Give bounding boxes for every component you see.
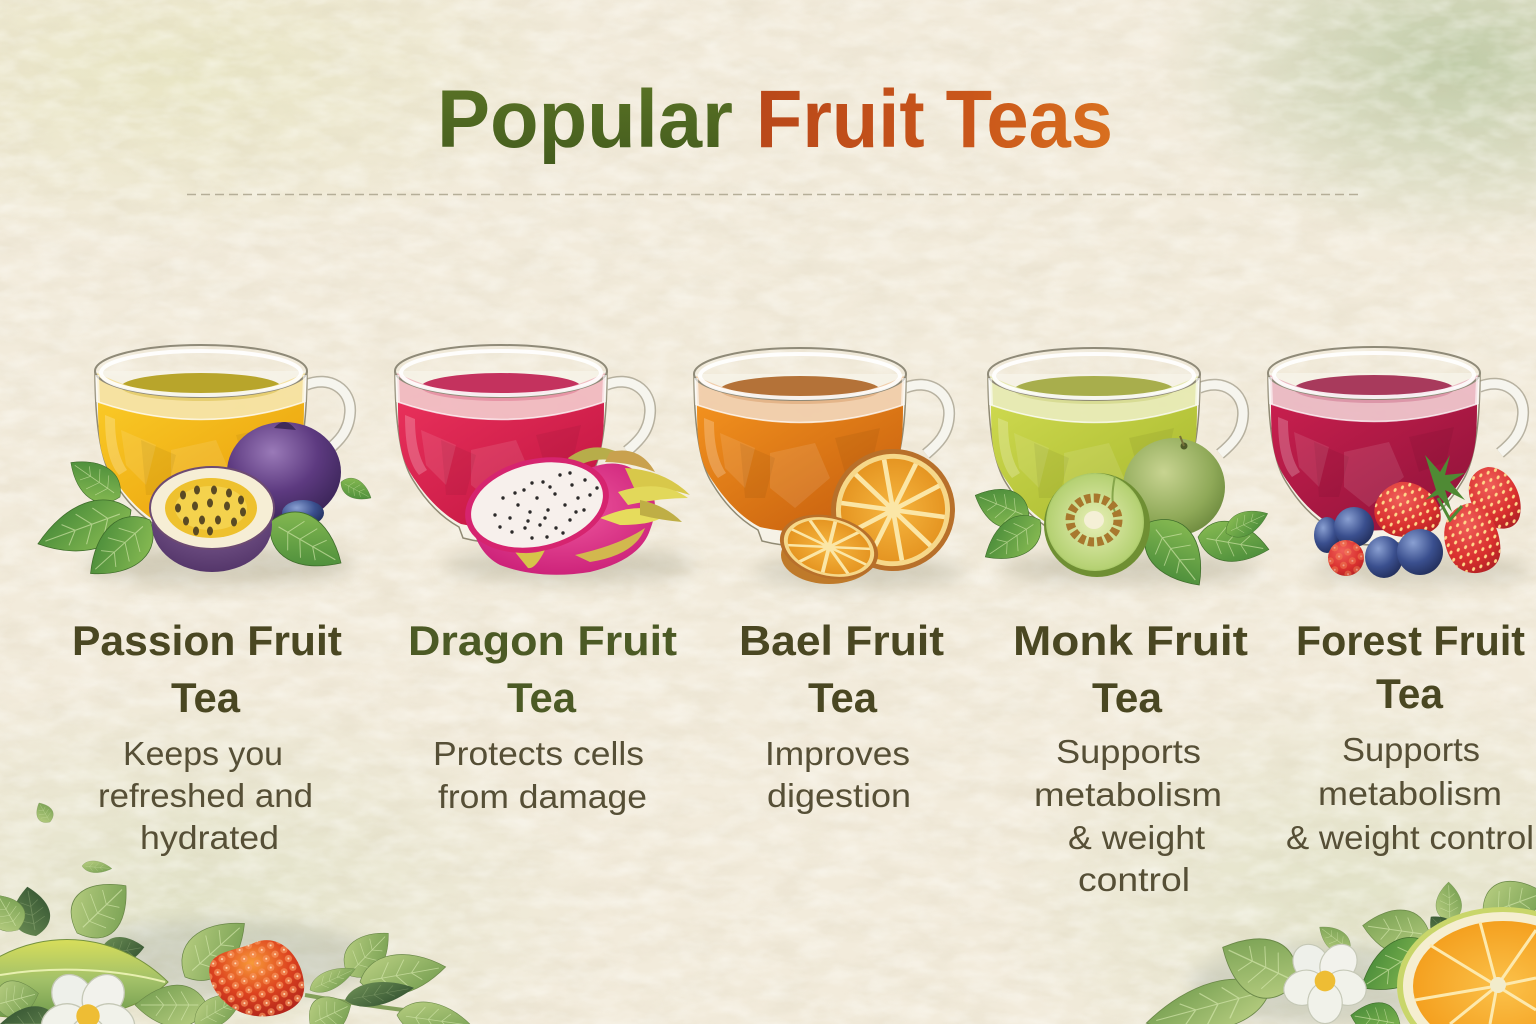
blueberry — [282, 500, 324, 526]
card: passion fruit tea — [30, 345, 376, 857]
cup: monk fruit tea — [988, 348, 1243, 546]
bael slice: small — [773, 505, 885, 589]
name: forest fruit tea: Forest Fruit — [1296, 617, 1525, 664]
name: dragon fruit tea: Tea — [507, 674, 577, 721]
shadow under dragon fruit — [445, 547, 695, 583]
name: passion fruit tea: Tea — [171, 674, 241, 721]
whole monk fruit — [1123, 436, 1225, 536]
description: forest fruit tea: metabolism — [1318, 776, 1502, 813]
description: monk fruit tea: & weight — [1068, 820, 1206, 857]
leaves: monk fruit — [968, 479, 1273, 573]
card: monk fruit tea — [968, 348, 1273, 899]
description: passion fruit tea — [98, 736, 313, 857]
name: bael fruit tea — [739, 617, 944, 721]
shadow under forest fruit — [1310, 556, 1530, 584]
cup: forest fruit tea — [1268, 347, 1523, 545]
name: monk fruit tea: Tea — [1092, 674, 1163, 721]
bael slice: large — [821, 439, 965, 581]
orange slice — [1397, 907, 1536, 1024]
decoration: bottom-left foliage with berry and flower — [0, 799, 474, 1024]
description: forest fruit tea: & weight control — [1286, 820, 1534, 857]
berry — [209, 940, 304, 1016]
description: monk fruit tea — [1034, 734, 1222, 899]
name: forest fruit tea — [1296, 617, 1525, 717]
white flower — [1279, 937, 1371, 1024]
dragon fruit — [456, 444, 690, 575]
blueberries — [1314, 507, 1443, 578]
description: bael fruit tea — [765, 736, 911, 815]
leaf: front monk fruit — [1132, 506, 1219, 599]
raspberry — [1328, 540, 1364, 576]
description: monk fruit tea: Supports — [1056, 734, 1201, 771]
halved monk fruit — [1044, 473, 1150, 577]
decoration: bottom-right foliage with orange and flower — [1141, 870, 1536, 1024]
name: monk fruit tea — [1013, 617, 1248, 721]
name: passion fruit tea — [72, 617, 342, 721]
shadow under passion fruit — [85, 545, 355, 585]
white flower — [36, 966, 140, 1024]
title: Popular — [437, 74, 733, 165]
description: dragon fruit tea: from damage — [438, 779, 647, 816]
halved passion fruit — [150, 467, 274, 572]
name: bael fruit tea: Tea — [808, 674, 878, 721]
card: bael fruit tea — [694, 348, 965, 815]
name: dragon fruit tea: Dragon Fruit — [408, 617, 677, 664]
shadow under bael fruit — [755, 556, 965, 588]
cup: bael fruit tea — [694, 348, 949, 546]
description: forest fruit tea: Supports — [1342, 732, 1480, 769]
description: passion fruit tea: hydrated — [140, 820, 279, 857]
name: passion fruit tea: Passion Fruit — [72, 617, 342, 664]
shadow under monk fruit — [1000, 552, 1260, 584]
description: monk fruit tea: control — [1078, 862, 1190, 899]
title — [437, 74, 1113, 165]
whole passion fruit — [227, 422, 341, 522]
description: bael fruit tea: Improves — [765, 736, 910, 773]
leaf: front mint — [258, 500, 354, 583]
description: monk fruit tea: metabolism — [1034, 777, 1222, 814]
description: passion fruit tea: Keeps you — [123, 736, 283, 773]
description: forest fruit tea — [1286, 732, 1534, 857]
strawberries — [1374, 455, 1521, 573]
name: bael fruit tea: Bael Fruit — [739, 617, 944, 664]
description: dragon fruit tea: Protects cells — [433, 736, 644, 773]
name: dragon fruit tea — [408, 617, 677, 721]
description: bael fruit tea: digestion — [767, 778, 911, 815]
description: dragon fruit tea — [433, 736, 647, 816]
description: passion fruit tea: refreshed and — [98, 778, 313, 815]
cup: passion fruit tea — [95, 345, 350, 543]
name: forest fruit tea: Tea — [1376, 670, 1444, 717]
leaves: passion fruit — [30, 449, 376, 592]
name: monk fruit tea: Monk Fruit — [1013, 617, 1248, 664]
card: forest fruit tea — [1268, 347, 1534, 857]
cup: dragon fruit tea — [395, 345, 650, 543]
card: dragon fruit tea — [395, 345, 695, 816]
title: Fruit Teas — [756, 74, 1113, 165]
